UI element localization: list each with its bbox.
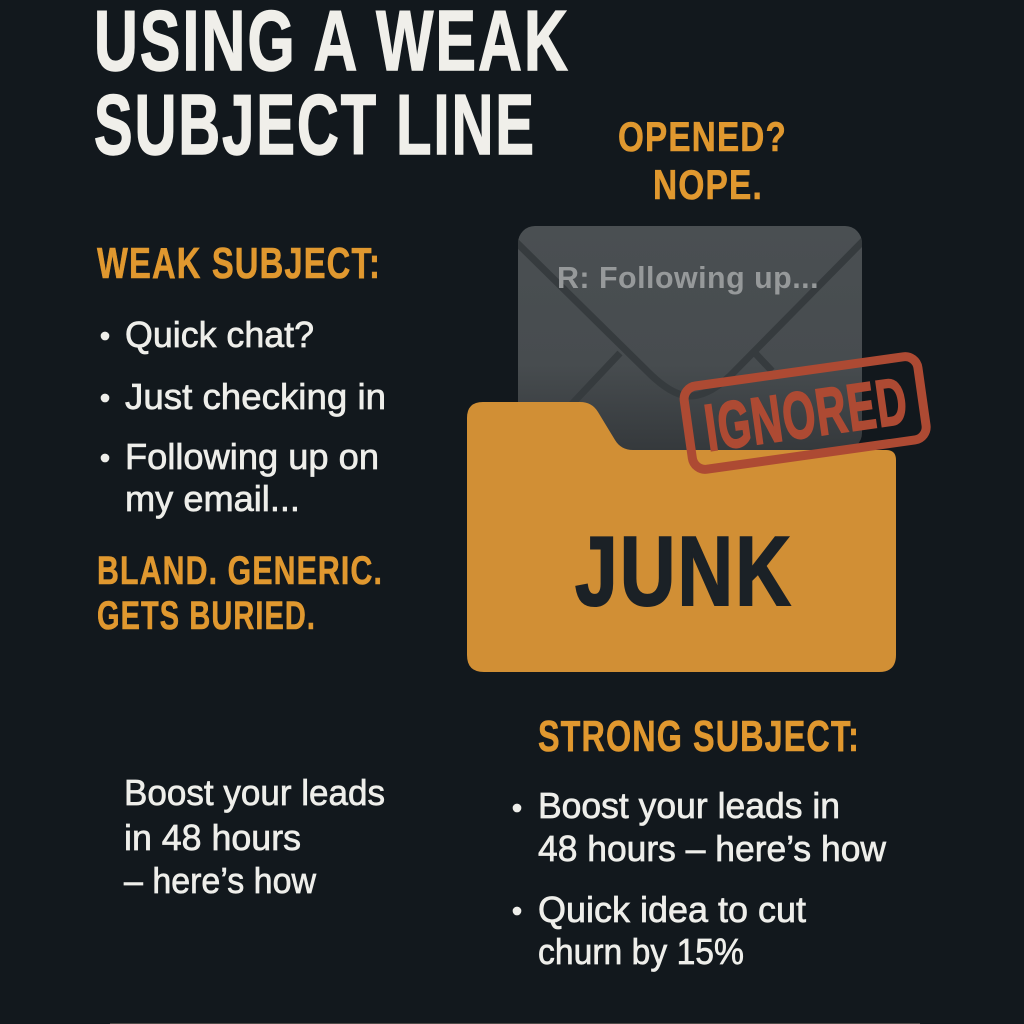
icon: junk folder xyxy=(467,402,896,672)
list: strong subject examples: Quick idea to cut xyxy=(538,889,806,930)
list: strong subject examples: churn by 15% xyxy=(538,931,744,972)
envelope subject text: R: Following up... xyxy=(557,260,819,295)
text: example subject line xyxy=(124,772,385,901)
text: example subject line: – here’s how xyxy=(124,860,317,901)
list: weak subject examples: my email... xyxy=(125,478,300,519)
callout: opened? nope.: OPENED? xyxy=(618,113,787,160)
panel: weak subject xyxy=(97,239,386,638)
icon: envelope xyxy=(514,226,866,450)
callout: opened? nope.: NOPE. xyxy=(653,161,763,208)
title xyxy=(94,0,570,173)
list: weak subject examples xyxy=(101,314,386,519)
text: bland generic gets buried: GETS BURIED. xyxy=(97,594,316,638)
list: strong subject examples xyxy=(513,785,887,972)
list: weak subject examples: Just checking in xyxy=(125,376,386,417)
folder label: JUNK xyxy=(575,516,793,626)
heading: strong subject: STRONG SUBJECT: xyxy=(538,712,860,761)
list: weak subject examples: Following up on xyxy=(125,436,379,477)
panel: strong subject xyxy=(513,712,887,972)
stamp: ignored: IGNORED xyxy=(700,363,912,465)
title: SUBJECT LINE xyxy=(94,78,536,173)
text: bland generic gets buried: BLAND. GENERIC. xyxy=(97,549,383,593)
list: strong subject examples: 48 hours – here’s how xyxy=(538,828,887,869)
list: weak subject examples: Quick chat? xyxy=(125,314,314,355)
text: example subject line: Boost your leads xyxy=(124,772,385,813)
text: example subject line: in 48 hours xyxy=(124,817,301,858)
list: strong subject examples: Boost your leads in xyxy=(538,785,840,826)
stamp: ignored xyxy=(682,355,928,471)
callout: opened? nope. xyxy=(618,113,787,208)
text: bland generic gets buried xyxy=(97,549,383,638)
heading: weak subject: WEAK SUBJECT: xyxy=(97,239,381,288)
